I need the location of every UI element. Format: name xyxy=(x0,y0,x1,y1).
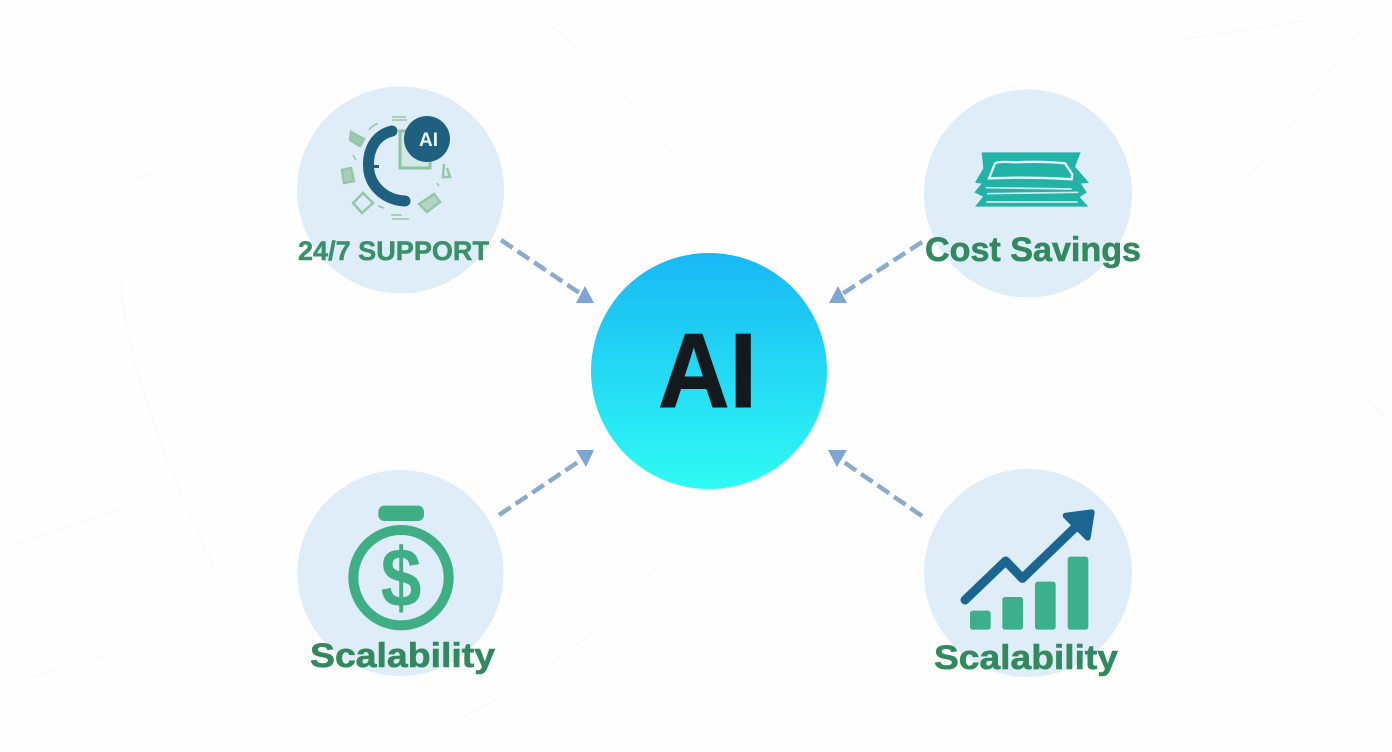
label: Cost Savings: Cost Savings xyxy=(925,231,1141,269)
label: 24/7 SUPPORT: 24/7 SUPPORT xyxy=(298,236,489,266)
central AI hub xyxy=(591,253,827,489)
circle: cost savings background xyxy=(924,90,1132,298)
label: Scalability: Scalability xyxy=(310,637,495,675)
heading: AI: AI xyxy=(658,312,757,430)
arrow: bottom-left to AI xyxy=(499,450,594,515)
panel: cost savings xyxy=(924,90,1141,298)
panel: scalability with growth chart xyxy=(924,469,1132,677)
icon: growth bar chart xyxy=(965,512,1092,630)
circle: bottom-right background xyxy=(924,469,1132,677)
icon: dollar coin xyxy=(353,506,449,625)
label: Scalability: Scalability xyxy=(934,639,1118,677)
icon: AI badge: AI xyxy=(419,130,438,151)
panel: scalability with dollar icon xyxy=(298,470,504,676)
trend arrow xyxy=(965,512,1092,600)
circle: 24/7 support background xyxy=(297,86,504,294)
icon: dollar coin: $ xyxy=(381,531,421,624)
bars xyxy=(970,557,1088,630)
arrow: top-left to AI xyxy=(501,240,594,303)
circle: bottom-left background xyxy=(298,470,504,676)
arrow: bottom-right to AI xyxy=(828,450,922,516)
icon: clock with AI badge xyxy=(342,116,450,219)
icon: stack of cash xyxy=(974,152,1089,207)
panel: 24/7 support xyxy=(297,86,504,294)
arrow: top-right to AI xyxy=(829,242,922,303)
